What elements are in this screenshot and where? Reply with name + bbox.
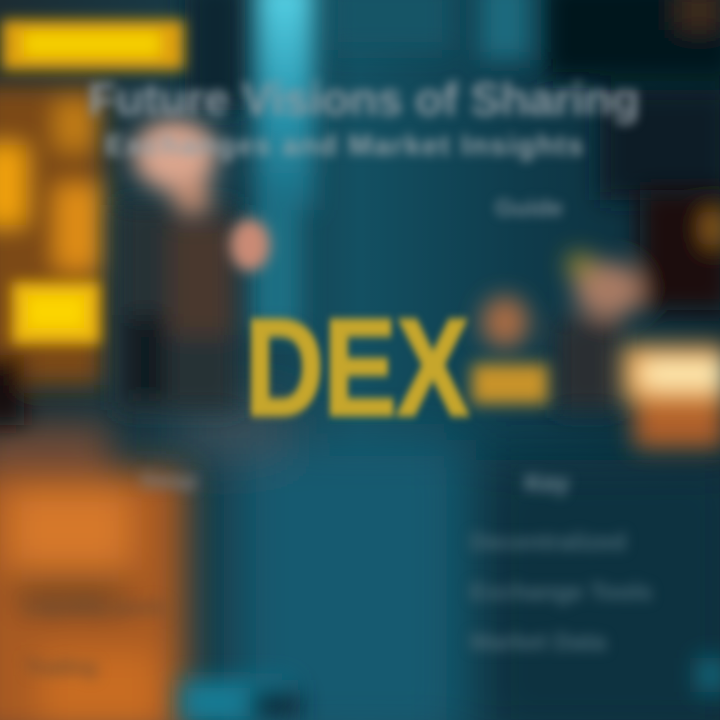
right figures	[481, 190, 720, 410]
yellow sign top left	[2, 20, 184, 70]
left body label: Swap	[140, 468, 197, 493]
left body text: Trading	[25, 657, 97, 679]
DEX headline: DEX	[245, 291, 469, 445]
small caption: Guide	[495, 195, 563, 222]
lower teal floor	[180, 405, 720, 720]
left body text: Liquidity pools	[25, 597, 167, 619]
cyan light beam	[250, 0, 314, 330]
orange floor bottom left	[0, 425, 185, 720]
subtitle: Exchanges and Market Insights	[105, 130, 585, 162]
right body text: Decentralized	[470, 529, 626, 556]
left body text	[24, 597, 167, 683]
dark top band	[185, 0, 720, 200]
orange left wall	[0, 85, 103, 425]
right heading: Key	[525, 470, 569, 497]
DEX tag	[472, 364, 548, 404]
right body text	[468, 529, 654, 656]
figure hand	[230, 219, 270, 271]
title: Future Visions of Sharing	[88, 73, 639, 125]
dark figure left	[118, 205, 238, 410]
right body text: Exchange Tools	[470, 579, 652, 606]
figure face	[133, 119, 217, 216]
yellow sign left	[12, 282, 100, 344]
small cyan bottom accents	[180, 658, 720, 720]
right body text: Market Data	[470, 629, 606, 656]
glowing candle right	[622, 345, 720, 448]
